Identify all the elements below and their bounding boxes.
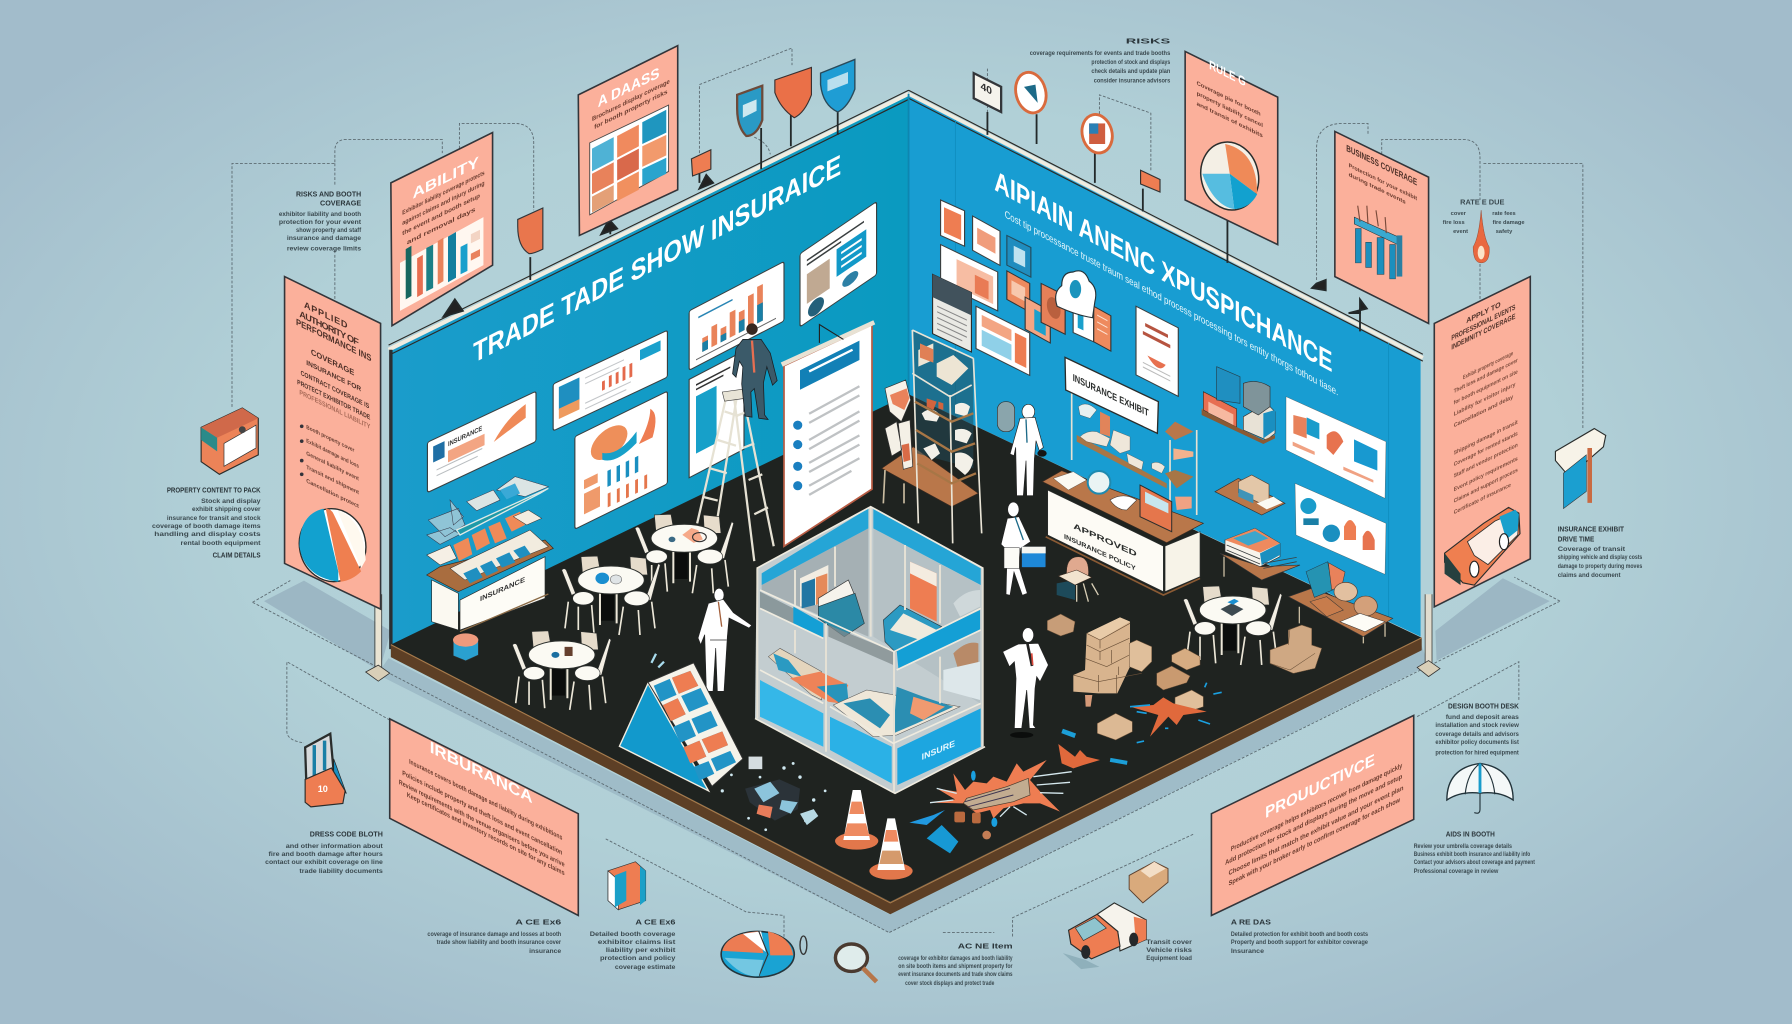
small bucket [453,633,478,661]
text lines: Speak with your broker early to confirm coverage for each show [1229,795,1400,888]
text block: flame: cover [1451,211,1467,217]
text block: insurance a: trade show liability and booth insurance cover [437,940,562,946]
text block: bottom centre: event insurance documents and trade show claims [898,972,1013,978]
icon: bag [305,734,346,807]
blue bottom bands [760,680,823,747]
text block: insurance b: coverage estimate [615,965,676,971]
poster: product [800,202,877,327]
text block: right tall panel caption: INSURANCE EXHIBIT [1558,524,1624,533]
text block: left box: coverage of booth damage items [152,524,261,530]
text lines: Exhibitor liability coverage protects [402,170,485,217]
stems: board supports [443,110,1367,331]
text lines: the event and booth setup [402,193,480,237]
poster: small blue [1007,235,1031,277]
text lines [402,170,485,246]
text block: top right [1030,36,1171,84]
text block: insurance b: exhibitor claims list [598,940,675,946]
board: left tall panel: Booth property cover [306,425,355,454]
text block: flame [1443,198,1525,235]
text block: umbrella: Business exhibit booth insurance and liability info [1414,852,1531,858]
text lines: Insurance covers booth damage and liability during exhibitions [409,757,562,842]
text block: bag: trade liability documents [299,869,384,875]
square sign: 40 [981,81,992,98]
text block: bottom centre: coverage for exhibitor damages and booth liability [898,956,1013,962]
text block: lower right upper: DESIGN BOOTH DESK [1448,702,1519,711]
text: left tall panel: APPLIED [304,300,347,332]
text block: insurance b: A CE Ex6 [635,918,675,927]
text block: insurance a: insurance [529,949,562,955]
text block: truck [1146,940,1193,962]
text block: left box: handling and display costs [154,532,262,538]
cone 1 [835,790,878,850]
table with chairs 3 [512,631,611,710]
burst: wreck [930,760,1060,818]
poster: orange tag [1007,271,1030,312]
board: right tall panel: Certificate of insurance [1454,482,1511,516]
board: left tall panel [285,277,381,609]
text blocks [152,36,1643,987]
table with chairs 1 [635,514,734,593]
text block: left box: rental booth equipment [181,541,261,547]
text block: insurance b: liability per exhibit [606,948,675,954]
text block: lower right upper: installation and stock review [1435,723,1519,729]
poster: forecast [553,330,667,431]
text block: flame: RATE E DUE [1460,198,1504,207]
text block: insurance b: protection and policy [600,956,676,962]
board: right tall panel: Event policy requirements [1454,456,1518,493]
text lines: Productive coverage helps exhibitors recover from damage quickly [1231,761,1402,853]
text block: umbrella [1414,830,1535,875]
text block: bag [265,830,384,875]
text block: upper left: show property and staff [296,228,361,234]
magazines [885,380,911,422]
stand table: books [1220,528,1300,580]
text lines: during trade events [1349,172,1406,206]
scattered debris [721,757,827,831]
floor shadow band [264,578,1550,933]
icon: truck [1063,903,1146,969]
text block: bag: and other information about [286,844,383,850]
text block: umbrella: AIDS IN BOOTH [1446,830,1495,839]
board: chart panel [391,133,493,326]
bar chart [400,217,483,311]
text block: insurance b: Detailed booth coverage [590,932,676,938]
blue mid bands [760,592,823,638]
poster: icons [1295,483,1386,574]
text block: bottom right: A RE DAS [1231,918,1271,927]
text: left tall panel [296,300,372,431]
heading: PROUUCTIVCE [1265,750,1375,822]
board: right tall panel: Shipping damage in transit [1454,420,1518,457]
text: left tall panel: PERFORMANCE INS [296,317,372,365]
kiosk: INSURANCE EXHIBIT [1073,372,1149,419]
icon: orange box [201,408,258,474]
board: right tall panel: for booth equipment on site [1454,369,1518,406]
board: pie panel [1185,51,1278,245]
text block: bag: DRESS CODE BLOTH [310,830,383,839]
counter top [1042,471,1203,543]
text lines: for booth property risks [594,88,668,131]
person: back right [997,402,1047,496]
poster: wave [1286,397,1386,498]
glass booth [755,507,985,793]
board: right tall panel: Coverage for rented stands [1454,431,1518,468]
text block: umbrella: Contact your advisors about coverage and payment [1414,860,1535,866]
heading: RULE G [1209,57,1246,89]
text block: right tall panel caption [1558,524,1643,579]
kiosk shelves [1077,435,1167,488]
text block: bottom centre: on site booth items and shipment property for [898,964,1013,970]
board: right tall panel: Claims and support process [1454,467,1518,505]
brochure rows [450,530,548,580]
shield 1 [737,86,762,136]
text block: lower right upper: coverage details and advisors [1435,732,1520,738]
glass body [755,507,983,793]
poster: wide [941,245,998,311]
shield 3 [821,59,855,112]
stand table: boxes and magazines [1288,562,1393,643]
text block: flame: safety [1496,229,1513,235]
tall stack [1073,617,1130,693]
text block: right tall panel caption: Coverage of transit [1558,547,1625,553]
pie chart [1194,136,1266,216]
icon: pie chart [721,931,807,977]
poster: plan: INSURANCE [448,424,482,448]
text block: truck: Equipment load [1146,956,1192,962]
text: left tall panel: COVERAGE [311,347,355,378]
icons: round signs [974,69,1160,192]
poster: coverage [976,306,1030,375]
text lines: Policies include property and theft loss and event cancellation [402,768,562,857]
text lines: Coverage pie for booth [1197,81,1261,118]
text block: bag: contact our exhibit coverage on line [265,860,384,866]
text lines: Add protection for stock and displays during the move and setup [1225,772,1403,867]
wall: left [389,90,909,649]
icon: damaged vehicle [1445,507,1520,585]
heading: IRBURANCA [430,738,533,807]
blue top bands [762,508,868,585]
text block: bottom right [1231,918,1369,955]
table with chairs 4 [1183,586,1282,665]
icon: open box [1129,862,1168,903]
text block: top right: RISKS [1126,36,1170,45]
text block: top right: check details and update plan [1091,69,1171,75]
poster: list [1073,298,1094,342]
text block: upper left: exhibitor liability and booth [279,212,362,218]
text: left tall panel: AUTHORITY OF [299,309,359,349]
icon: scroll sign [1555,429,1606,509]
icon: magnifier [835,944,877,982]
text block: left box: PROPERTY CONTENT TO PACK [167,486,261,495]
text block: left box: insurance for transit and stock [167,516,261,522]
table with chairs 2 [562,556,660,635]
wall: right [909,90,1423,637]
text block: top right: consider insurance advisors [1094,78,1171,84]
poster: dark booklet [933,274,971,352]
text lines: against claims and injury during [402,180,485,227]
text block: left box [152,486,262,560]
icon: bag: 10 [318,784,328,794]
text block: lower right upper: fund and deposit areas [1446,715,1520,721]
text block: truck: Transit cover [1146,940,1193,946]
text block: upper left: RISKS AND BOOTH [296,190,361,199]
square sign [974,73,1001,112]
board: right tall panel [1434,277,1530,607]
text: left tall panel: INSURANCE FOR [306,358,362,394]
board: left tall panel: Transit and shipment [306,465,359,496]
board: right tall panel: Liability for visitor injury [1454,382,1516,418]
illustration: columns [1354,206,1402,279]
text block: insurance a [427,918,562,955]
heading: ABILITY [413,154,479,203]
cardboard box stacks [1047,614,1322,768]
text: left tall panel: PROFESSIONAL LIABILITY [299,388,370,431]
text: left tall panel: CONTRACT COVERAGE IS [301,368,369,410]
text block: top right: protection of stock and displays [1091,60,1171,66]
contents: back left [800,565,828,607]
text lines: and removal days [407,206,476,246]
shield 4 [518,208,543,254]
text block: umbrella: Review your umbrella coverage details [1414,844,1513,850]
icon: cloud [1056,271,1096,318]
text block: upper left: COVERAGE [320,199,361,208]
board: right tall panel: Cancellation and delay [1454,394,1514,429]
shelf: small box [1215,475,1285,515]
text: right tall panel: PROFESSIONAL EVENTS [1451,303,1515,342]
small orange tag [691,150,711,176]
glass booth: INSURE [922,738,955,762]
person: center left [698,588,752,691]
heading: A DAASS [598,65,659,111]
board: left tall panel: Cancellation protect [306,479,359,510]
title: right wall: AIPIAIN ANENC XPUSPICHANCE [994,164,1333,379]
text block: upper left: review coverage limits [287,246,362,252]
photo grid [590,105,669,215]
heading: BUSINESS COVERAGE [1346,143,1418,189]
shield 2 [775,67,811,118]
posters: right wall [933,200,1386,574]
posters: left wall [427,202,877,529]
text block: right tall panel caption: shipping vehicle and display costs [1558,555,1643,561]
round sign photo [1078,111,1116,156]
board: columns panel [1335,131,1429,323]
board: left tall panel: General liability event [306,451,359,483]
poster: blue tag [1025,297,1050,343]
icon: umbrella [1447,763,1513,813]
text block: insurance a: coverage of insurance damage and losses at booth [427,932,561,938]
text block: bottom right: Detailed protection for exhibit booth and booth costs [1231,932,1369,938]
poster: behind ladder [689,351,744,478]
text block: lower right upper [1435,702,1520,756]
text block: umbrella: Professional coverage in review [1414,869,1499,875]
kiosk [1042,357,1203,595]
text lines: Choose limits that match the exhibit value and your event plan [1229,783,1403,877]
text block: flame: rate fees [1492,211,1516,217]
text lines: Keep certificates and inventory records on site for any claims [407,790,565,877]
kiosk sign [1065,357,1158,433]
text block: upper left [279,190,362,252]
counter body [432,580,458,630]
text block: right tall panel caption: claims and document [1558,573,1621,579]
ladder and standing man [697,323,777,561]
brochure counter [427,477,553,632]
side table [882,447,978,507]
contents: back right [910,562,937,622]
counter items [1088,471,1110,494]
poster: portrait [1041,283,1065,334]
round sign [1011,69,1050,116]
single box [1047,614,1075,636]
icon: flame marker [1473,210,1489,263]
text block: bottom centre [898,942,1013,987]
text: left tall panel: PROTECT EXHIBITOR TRADE [297,377,370,422]
booth frame [757,507,983,792]
subtitle: right wall: Cost tip processance truste traum seal ethod process processing tors entity thorgs tothou tiase. [1005,209,1338,398]
counter front [1048,490,1163,592]
floor [391,394,1422,914]
text block: bottom centre: AC NE Item [958,942,1013,951]
shelf back [913,330,973,468]
wall shelves and stand tables [1202,367,1393,643]
poster: plan [427,391,536,493]
text block: flame: fire loss [1443,220,1465,226]
shelf frame [912,330,982,543]
text lines: Protection for your exhibit [1349,163,1417,202]
board: insurance panel [390,719,578,915]
poster: brand [1136,306,1178,396]
text block: right tall panel caption: damage to property during moves [1558,564,1643,570]
text lines: and transit of exhibits [1197,101,1264,140]
falling boxes [1172,648,1200,670]
cone 2 [869,818,913,880]
text lines: property liability cancel [1197,91,1263,129]
poster: charts [575,391,667,529]
person: woman with bag [1001,502,1046,595]
text block: bottom right: Insurance [1231,949,1265,955]
title: left wall: TRADE TADE SHOW INSURAICE [473,149,841,370]
board: left tall panel: Exhibit damage and loss [306,439,359,470]
kiosk: APPROVED [1073,521,1137,559]
text lines [1197,81,1264,140]
kiosk posts [1072,393,1197,532]
text block: upper left: protection for your event [279,220,361,226]
poster stand [782,322,874,546]
box pile [1270,625,1322,673]
text block: flame: fire damage [1493,220,1525,226]
text block: left box: exhibit shipping cover [192,507,261,513]
text block: left box: Stock and display [201,499,261,505]
shards [909,810,945,825]
shelf unit and side table [882,330,982,543]
board: right tall panel: Staff and vendor protection [1454,442,1518,480]
text lines: Brochures display coverage [592,78,670,123]
text block: flame: event [1453,229,1468,235]
brochure counter: INSURANCE [480,575,525,603]
poster: bar chart [689,262,784,370]
contents: floor displays [768,648,822,700]
kiosk: INSURANCE POLICY [1064,534,1136,573]
side box [1129,640,1152,672]
text lines: Review requirements with the venue organisers before you arrive [399,777,565,869]
text block: insurance a: A CE Ex6 [515,918,561,927]
board: brochure panel [578,46,678,235]
text block: bag: fire and booth damage after hours [269,852,384,858]
poster: small orange [941,200,965,246]
text block: insurance b [590,918,676,971]
text block: top right: coverage requirements for events and trade booths [1030,51,1171,57]
text block: bottom right: Property and booth support for exhibitor coverage [1231,940,1369,946]
person: man with hands on hips [1003,628,1048,738]
text: right tall panel: APPLY TO [1466,300,1501,325]
a-frame brochure rack [619,654,743,791]
icons: shields [518,59,855,254]
poles [366,594,1440,681]
text block: bottom centre: cover stock displays and protect trade [905,981,995,987]
pie chart: left tall panel [293,502,373,588]
icon: book [608,862,646,910]
text block: left box: CLAIM DETAILS [213,551,261,560]
shelf: products [1202,367,1275,444]
board: productive panel [1211,715,1414,915]
burst: small [1058,744,1100,768]
burst: right debris [1130,697,1207,737]
poster: small white [973,216,1000,265]
text block: upper left: insurance and damage [287,236,362,242]
text block: truck: Vehicle risks [1146,948,1193,954]
tag sign [1141,170,1160,192]
board: right tall panel: Theft loss and damage cover [1454,358,1518,395]
text block: right tall panel caption: DRIVE TIME [1558,535,1594,544]
cones and wreck [835,760,1072,880]
text block: lower right upper: protection for hired equipment [1435,750,1519,756]
chair: near kiosk [1057,557,1098,602]
wood top [427,540,553,592]
text: right tall panel: INDEMNITY COVERAGE [1451,312,1515,352]
board: right tall panel: Exhibit property coverage [1463,351,1514,381]
poster: orange list [1094,306,1111,351]
dashed connector lines [232,48,1583,949]
text block: lower right upper: exhibitor policy documents list [1435,740,1519,746]
